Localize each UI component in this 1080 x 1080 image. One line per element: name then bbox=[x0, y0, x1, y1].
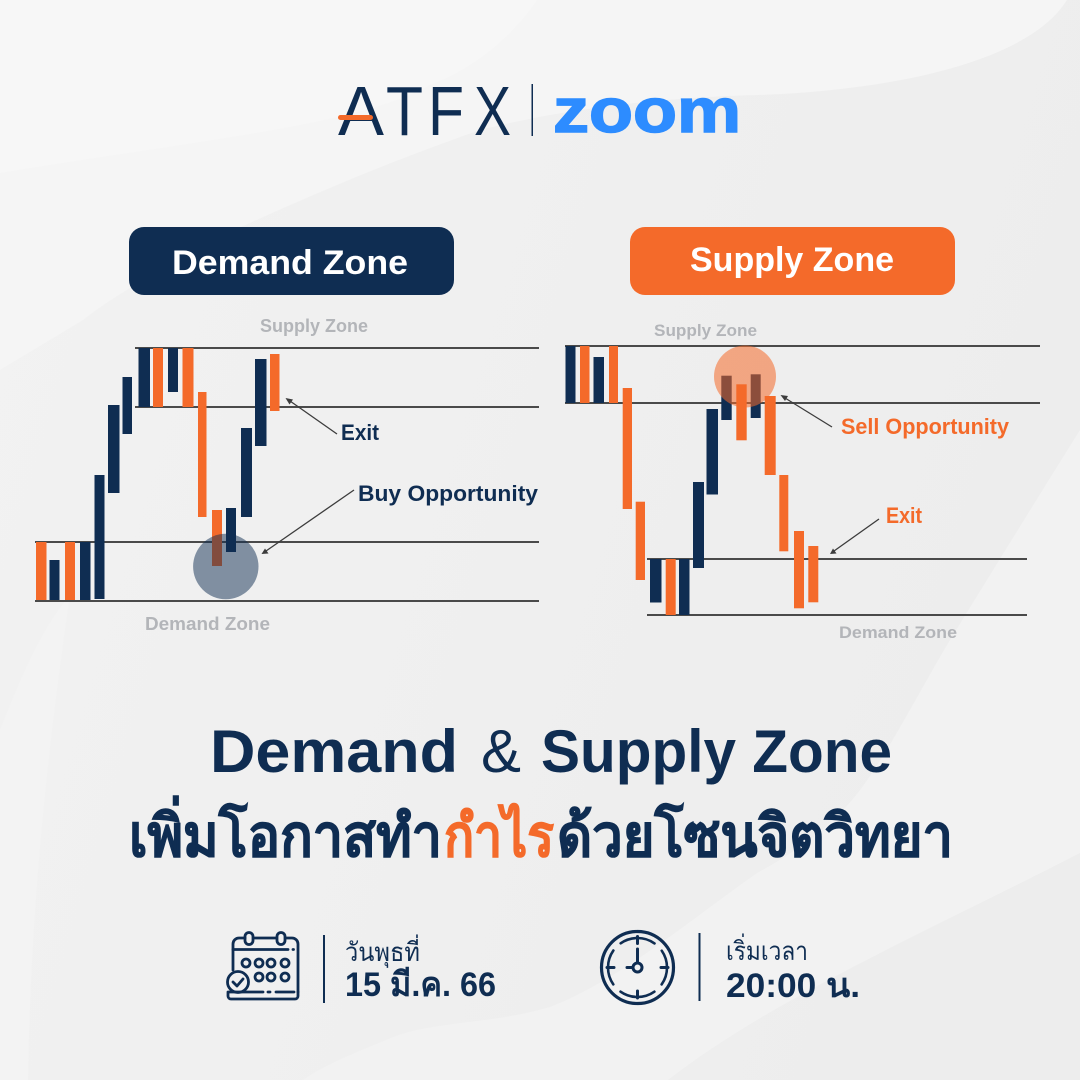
logo wordmark: zoom: zoom bbox=[553, 77, 741, 146]
label: Supply Zone: Supply Zone bbox=[654, 321, 757, 340]
label: Supply Zone: Supply Zone bbox=[260, 316, 368, 336]
text: date: 15 มี.ค. 66 bbox=[345, 966, 496, 1004]
text: start label: เริ่มเวลา bbox=[726, 933, 808, 966]
logo wordmark: ATFX: F bbox=[428, 72, 464, 150]
arrow: to sell opportunity bbox=[780, 395, 832, 427]
logo wordmark: ATFX: T bbox=[386, 72, 423, 150]
logo wordmark: ATFX bbox=[338, 72, 511, 150]
title: & bbox=[481, 718, 521, 785]
title: Demand bbox=[210, 718, 458, 785]
logo wordmark: ATFX: A bbox=[338, 72, 384, 150]
text: weekday: วันพุธที่ bbox=[345, 934, 420, 968]
subtitle: กำไร bbox=[444, 803, 554, 869]
label: Exit: Exit bbox=[341, 420, 380, 445]
icon: calendar bbox=[228, 932, 298, 999]
logo: ATFX | zoom bbox=[338, 72, 741, 150]
arrow: to buy opportunity bbox=[262, 490, 354, 554]
marker: sell circle bbox=[714, 346, 776, 408]
heading pill: Supply Zone bbox=[630, 227, 955, 295]
heading pill: Demand Zone bbox=[129, 227, 454, 295]
chart: demand zone candlesticks bbox=[35, 316, 539, 634]
subtitle bbox=[129, 795, 953, 869]
subtitle: ด้วยโซนจิตวิทยา bbox=[557, 801, 953, 869]
icon: clock bbox=[602, 932, 674, 1004]
marker: buy circle bbox=[193, 534, 258, 599]
label: Demand Zone: Demand Zone bbox=[145, 614, 270, 634]
text: start time: 20:00 น. bbox=[726, 967, 860, 1005]
title: Supply Zone bbox=[541, 718, 892, 785]
label: Sell Opportunity: Sell Opportunity bbox=[841, 414, 1010, 439]
label: Demand Zone: Demand Zone bbox=[839, 623, 957, 642]
arrow: to exit bbox=[830, 519, 879, 554]
event date bbox=[228, 932, 496, 1004]
label: Exit: Exit bbox=[886, 503, 923, 528]
event time bbox=[602, 932, 860, 1005]
subtitle: เพิ่มโอกาสทำ bbox=[129, 795, 442, 869]
heading pill: Demand Zone: Demand Zone bbox=[172, 244, 408, 282]
logo wordmark: ATFX: X bbox=[474, 72, 511, 150]
arrow: to exit bbox=[286, 398, 337, 434]
chart: supply zone candlesticks bbox=[565, 321, 1040, 642]
label: Buy Opportunity: Buy Opportunity bbox=[358, 481, 539, 506]
title bbox=[210, 718, 892, 785]
heading pill: Supply Zone: Supply Zone bbox=[690, 241, 894, 279]
